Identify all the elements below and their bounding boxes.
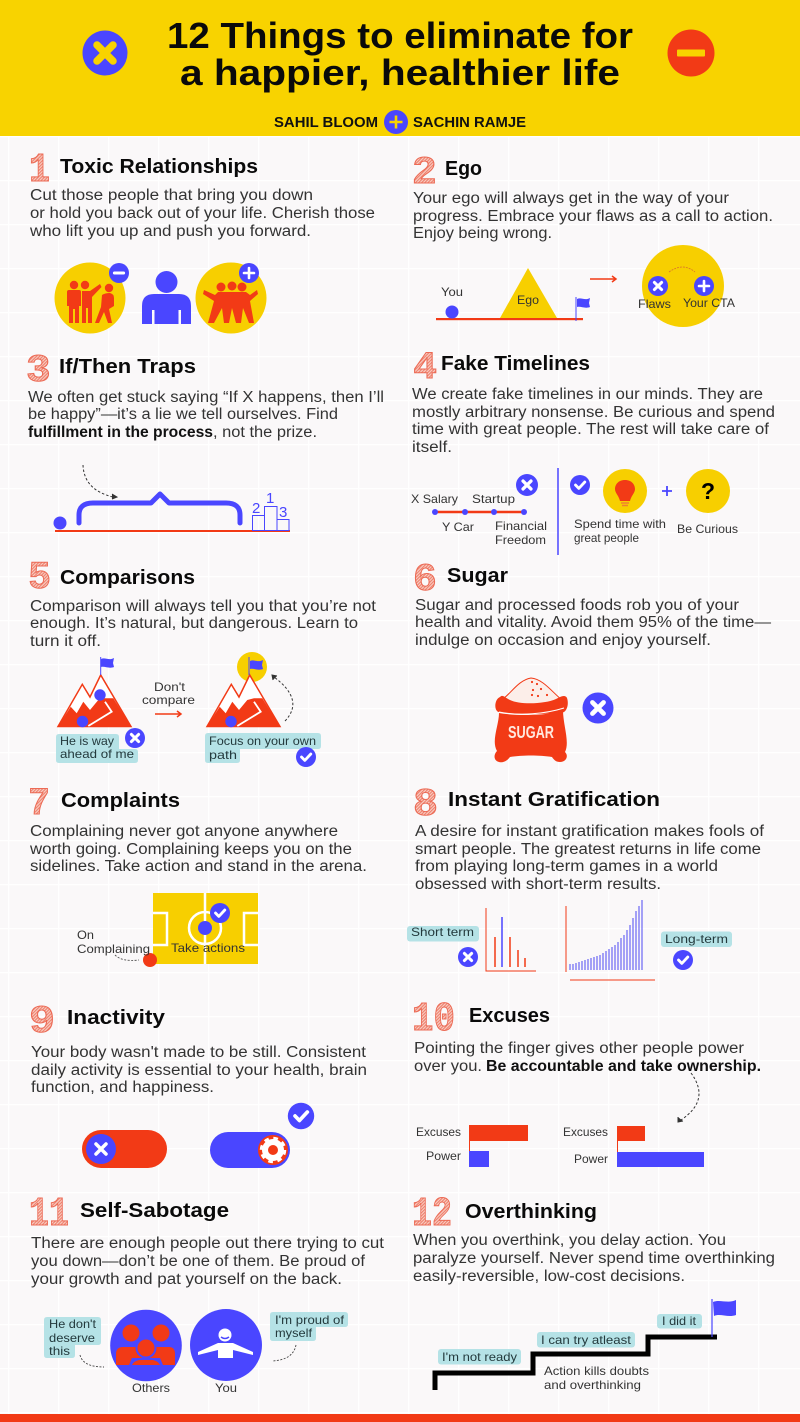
body text: health and vitality. Avoid them 95% of the time— [415, 614, 772, 631]
icon: check [570, 475, 590, 495]
icon: person [142, 271, 191, 324]
icon: flaws and CTA [638, 245, 735, 327]
callout: short term [407, 926, 479, 967]
authors [274, 110, 526, 134]
body text: time with great people. The rest will take care of [412, 421, 770, 438]
dont compare arrow: Don't [154, 681, 186, 694]
callout: did it [657, 1314, 702, 1328]
body text: mostly arbitrary nonsense. Be curious and spend [412, 404, 775, 421]
dashed arrow [83, 465, 117, 499]
body text: Complaining never got anyone anywhere [30, 823, 338, 840]
body text: function, and happiness. [31, 1079, 214, 1096]
body text: There are enough people out there trying to cut [31, 1235, 385, 1252]
label: on complaining [77, 929, 150, 960]
icon: others [110, 1310, 182, 1381]
panel: 5 comparisons [29, 555, 377, 767]
body text: Your body wasn't made to be still. Consistent [31, 1044, 367, 1061]
icon: bulb [603, 469, 647, 513]
callout: short term: Short term [411, 926, 474, 939]
header band [0, 0, 800, 136]
callout: ahead [56, 728, 145, 763]
chart: after: Excuses [563, 1126, 608, 1139]
flag [712, 1299, 736, 1337]
panel: 9 inactivity [30, 999, 367, 1168]
dont compare arrow: compare [142, 694, 195, 707]
panel: 12 overthinking [412, 1192, 775, 1392]
number 3: 3 [27, 348, 50, 389]
labels [132, 1382, 237, 1395]
heading: Self-Sabotage [80, 1200, 229, 1222]
panel: 10 excuses [412, 997, 761, 1167]
chart: before [416, 1125, 528, 1167]
icon: question [686, 469, 730, 513]
note: Action kills doubts [544, 1365, 649, 1378]
dashed arrow [272, 1345, 296, 1361]
body text [31, 1044, 367, 1096]
heading: Sugar [447, 565, 508, 587]
callout: he dont deserve: He don't [49, 1318, 97, 1331]
timeline diagram: Startup [472, 493, 515, 506]
body text: When you overthink, you delay action. You [413, 1232, 726, 1249]
callout: ahead: He is way [60, 735, 114, 748]
chart: ego mountain: You [441, 286, 463, 299]
title: 12 Things to eliminate for [167, 15, 633, 56]
body text: turn it off. [30, 633, 101, 650]
note [544, 1365, 649, 1392]
body text: worth going. Complaining keeps you on the [29, 841, 352, 858]
arrow [590, 276, 616, 282]
body text: you down—don’t be one of them. Be proud of [31, 1253, 366, 1270]
body text: fulfillment in the process [28, 424, 213, 441]
number 9: 9 [30, 999, 54, 1040]
body text [413, 1232, 775, 1285]
panel: 4 fake timelines [411, 345, 775, 555]
labels: great people [574, 532, 639, 545]
callout: ahead: ahead of me [60, 748, 134, 761]
number 6: 6 [414, 557, 436, 598]
footer band [0, 1414, 800, 1422]
callout: he dont deserve: this [49, 1345, 70, 1358]
chart: after [563, 1126, 704, 1167]
body text: Comparison will always tell you that you’re not [30, 598, 377, 615]
chart: process to prize: 3 [279, 504, 287, 521]
callout: not ready [438, 1349, 521, 1364]
icon: sugar sack [495, 678, 568, 762]
chart: ego mountain [436, 268, 590, 321]
number 12: 12 [412, 1192, 452, 1238]
body text: We create fake timelines in our minds. They are [412, 386, 763, 403]
timeline diagram: X Salary [411, 493, 458, 506]
body text [412, 386, 775, 456]
number 8: 8 [414, 782, 437, 823]
callout: not ready: I'm not ready [442, 1351, 517, 1364]
dashed arrow [678, 1073, 699, 1122]
panel: 8 instant gratification [407, 782, 765, 980]
callout: own path: Focus on your own [209, 735, 316, 748]
labels [574, 518, 738, 545]
body text: indulge on occasion and enjoy yourself. [415, 632, 711, 649]
icon: mountain other [58, 657, 131, 727]
timeline diagram [411, 474, 547, 547]
timeline diagram: Y Car [442, 521, 474, 534]
chart: process to prize [54, 490, 290, 532]
body text: , not the prize. [213, 424, 317, 441]
divider line [557, 468, 559, 555]
chart: long term bars [566, 900, 655, 980]
icon: x badge [582, 692, 614, 724]
number 2: 2 [413, 150, 436, 191]
panel: 11 self-sabotage [29, 1192, 385, 1395]
heading: If/Then Traps [59, 356, 196, 378]
label: on complaining: Complaining [77, 943, 150, 956]
chart: process to prize: 1 [266, 490, 274, 507]
stairs [435, 1337, 717, 1390]
body text [30, 598, 377, 650]
body text: over you. [414, 1058, 482, 1075]
body text: easily-reversible, low-cost decisions. [413, 1268, 685, 1285]
timeline diagram: Freedom [495, 534, 546, 547]
panel: 2 ego [413, 150, 773, 327]
body text: Cut those people that bring you down [30, 187, 313, 204]
callout: proud [270, 1312, 348, 1341]
callout: proud: I'm proud of [275, 1314, 345, 1327]
authors: SACHIN RAMJE [413, 115, 526, 131]
body text: Your ego will always get in the way of your [413, 190, 729, 207]
heading: Ego [445, 158, 482, 180]
body text: from playing long-term games in a world [415, 858, 718, 875]
body text: smart people. The greatest returns in life come [415, 841, 761, 858]
icon: flaws and CTA: Your CTA [683, 297, 735, 310]
heading: Inactivity [67, 1007, 166, 1029]
heading: Toxic Relationships [60, 156, 258, 178]
dashed arrow [80, 1355, 104, 1367]
body text: Sugar and processed foods rob you of your [415, 597, 739, 614]
icon: mountain own [207, 652, 280, 727]
callout: long term [661, 932, 732, 970]
body text: Be accountable and take ownership. [486, 1058, 761, 1075]
panel: 6 sugar [414, 557, 772, 762]
note: and overthinking [544, 1379, 641, 1392]
heading: Instant Gratification [448, 789, 660, 811]
plus sign [662, 486, 672, 496]
icon: toggle on [210, 1132, 290, 1168]
body text [414, 1040, 761, 1075]
body text: be happy”—it’s a lie we tell ourselves. Find [28, 406, 338, 423]
body text [413, 190, 773, 242]
labels: Be Curious [677, 523, 738, 536]
heading: Comparisons [60, 567, 195, 589]
body text: or hold you back out of your life. Cherish those [30, 205, 375, 222]
icon: arena field [143, 893, 258, 967]
body text: enough. It’s natural, but dangerous. Learn to [30, 615, 358, 632]
number 7: 7 [29, 781, 49, 822]
number 11: 11 [29, 1192, 69, 1238]
chart: before: Power [426, 1150, 461, 1163]
icon: arena field: Take actions [171, 942, 245, 955]
panel: 1 toxic relationships [29, 148, 375, 334]
icon: minus badge [668, 30, 714, 76]
body text [28, 389, 384, 441]
callout: he dont deserve [44, 1317, 101, 1358]
chart: before: Excuses [416, 1126, 461, 1139]
body text: your growth and pat yourself on the back. [31, 1271, 342, 1288]
body text: itself. [412, 439, 452, 456]
title: a happier, healthier life [180, 52, 620, 93]
body text [29, 187, 375, 240]
callout: did it: I did it [662, 1315, 697, 1328]
heading: Overthinking [465, 1201, 597, 1223]
body text [29, 823, 367, 875]
body text [415, 823, 765, 893]
icon: check badge [288, 1103, 314, 1129]
chart: after: Power [574, 1153, 608, 1166]
body text: progress. Embrace your flaws as a call to action. [413, 208, 773, 225]
callout: own path [205, 733, 321, 767]
callout: he dont deserve: deserve [49, 1332, 95, 1345]
body text: We often get stuck saying “If X happens, then I’ll [28, 389, 384, 406]
body text: paralyze yourself. Never spend time overthinking [413, 1250, 775, 1267]
number 10: 10 [412, 997, 455, 1043]
authors: SAHIL BLOOM [274, 115, 378, 131]
icon: x badge [82, 30, 128, 76]
panel: 3 if/then traps [27, 348, 384, 532]
callout: long term: Long-term [665, 933, 728, 946]
title [167, 15, 633, 93]
icon: toxic group [54, 262, 129, 334]
heading: Excuses [469, 1005, 550, 1027]
labels: Others [132, 1382, 170, 1395]
chart: ego mountain: Ego [517, 294, 539, 307]
icon: toggle off [82, 1130, 167, 1168]
number 4: 4 [414, 345, 436, 386]
dashed arrow [272, 675, 293, 721]
body text: sidelines. Take action and stand in the arena. [30, 858, 367, 875]
number 1: 1 [29, 148, 50, 194]
heading: Complaints [61, 790, 180, 812]
heading: Fake Timelines [441, 353, 590, 375]
labels: You [215, 1382, 237, 1395]
body text: A desire for instant gratification makes fools of [415, 823, 765, 840]
chart: short term bars [486, 908, 536, 971]
callout: own path: path [209, 749, 237, 762]
icon: supportive group [196, 262, 266, 334]
number 5: 5 [29, 555, 50, 596]
body text: Enjoy being wrong. [413, 225, 552, 242]
body text [415, 597, 772, 649]
icon: you [190, 1309, 262, 1381]
timeline diagram: Financial [495, 520, 547, 533]
dont compare arrow [142, 681, 195, 717]
callout: try atleast: I can try atleast [541, 1334, 632, 1347]
body text [31, 1235, 385, 1288]
label: on complaining: On [77, 929, 94, 942]
callout: proud: myself [275, 1327, 313, 1340]
labels: Spend time with [574, 518, 666, 531]
body text: obsessed with short-term results. [415, 876, 661, 893]
icon: question: ? [701, 478, 715, 504]
body text: daily activity is essential to your health, brain [31, 1062, 367, 1079]
callout: try atleast [537, 1332, 635, 1348]
body text: Pointing the finger gives other people power [414, 1040, 744, 1057]
icon: sugar sack: SUGAR [508, 722, 554, 742]
chart: process to prize: 2 [252, 500, 260, 517]
body text: who lift you up and push you forward. [29, 223, 311, 240]
panel: 7 complaints [29, 781, 367, 967]
icon: flaws and CTA: Flaws [638, 298, 671, 311]
